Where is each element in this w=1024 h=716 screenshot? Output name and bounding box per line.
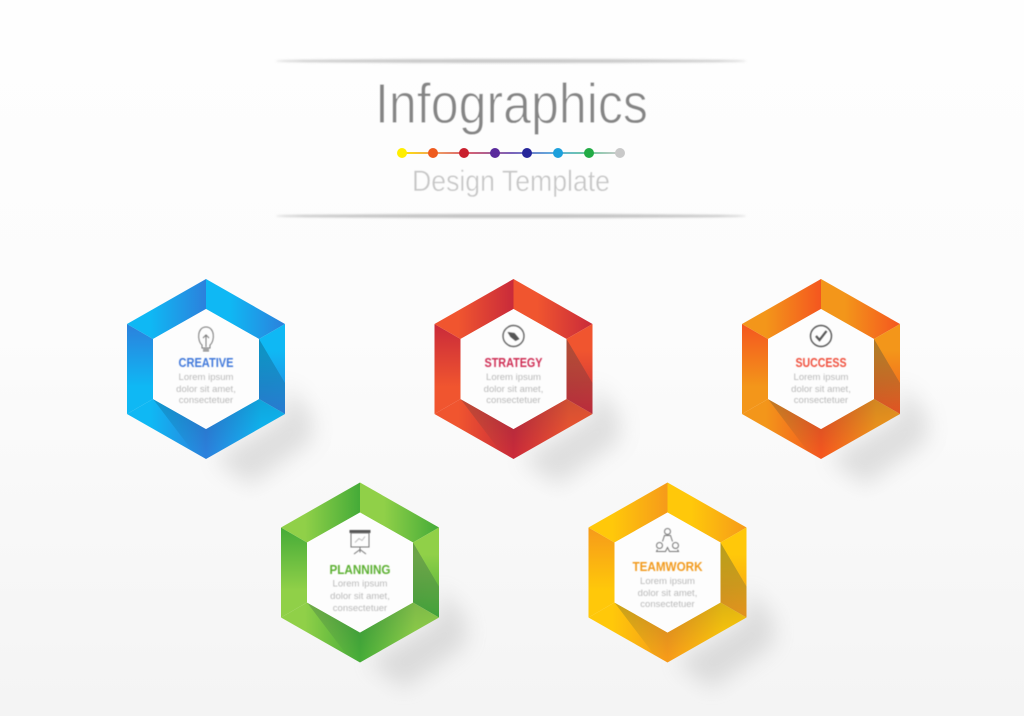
panel: creative [127,279,312,485]
body text: Lorem ipsum [333,578,388,590]
body text [484,372,543,406]
hexagon ring [127,279,285,459]
body text: dolor sit amet, [791,384,851,395]
body text: consectetuer [486,395,541,406]
body text [791,372,851,406]
hexagon ring [434,279,592,459]
body text: consectetuer [179,395,233,406]
colored dot timeline [397,148,625,158]
header divider: bottom [276,214,746,218]
inner white hexagon [307,512,413,632]
label: planning: PLANNING [330,562,390,577]
body text [638,576,697,610]
body text: consectetuer [794,395,848,406]
panel: teamwork [588,482,774,688]
body text: consectetuer [333,603,387,614]
body text: Lorem ipsum [640,576,695,587]
body text: dolor sit amet, [176,384,236,395]
body text: consectetuer [640,599,695,610]
panel: planning [281,482,466,688]
label: success: SUCCESS [796,355,847,370]
body text: dolor sit amet, [638,588,697,599]
body text: dolor sit amet, [484,384,543,395]
hexagon ring [742,279,900,459]
subtitle: Design Template [412,165,610,198]
body text: dolor sit amet, [330,591,390,602]
icon: check mark [810,326,832,346]
body text [330,578,390,614]
label: teamwork: TEAMWORK [632,559,703,574]
header divider: top [276,59,746,63]
title: Infographics [375,72,648,136]
icon: strategy badge [503,326,524,346]
label: strategy: STRATEGY [484,355,543,370]
panel: strategy [434,279,620,485]
inner white hexagon [768,309,874,429]
body text: Lorem ipsum [486,372,541,383]
body text: Lorem ipsum [794,372,849,383]
icon: presentation board [350,530,370,554]
body text: Lorem ipsum [179,372,234,383]
icon: team of people [656,528,678,552]
icon: light bulb [199,327,213,351]
panel: success [742,279,927,485]
inner white hexagon [614,512,720,632]
label: creative: CREATIVE [178,355,234,370]
hexagon ring [588,482,746,662]
hexagon ring [281,482,439,662]
inner white hexagon [153,309,259,429]
inner white hexagon [460,309,566,429]
body text [176,372,236,406]
